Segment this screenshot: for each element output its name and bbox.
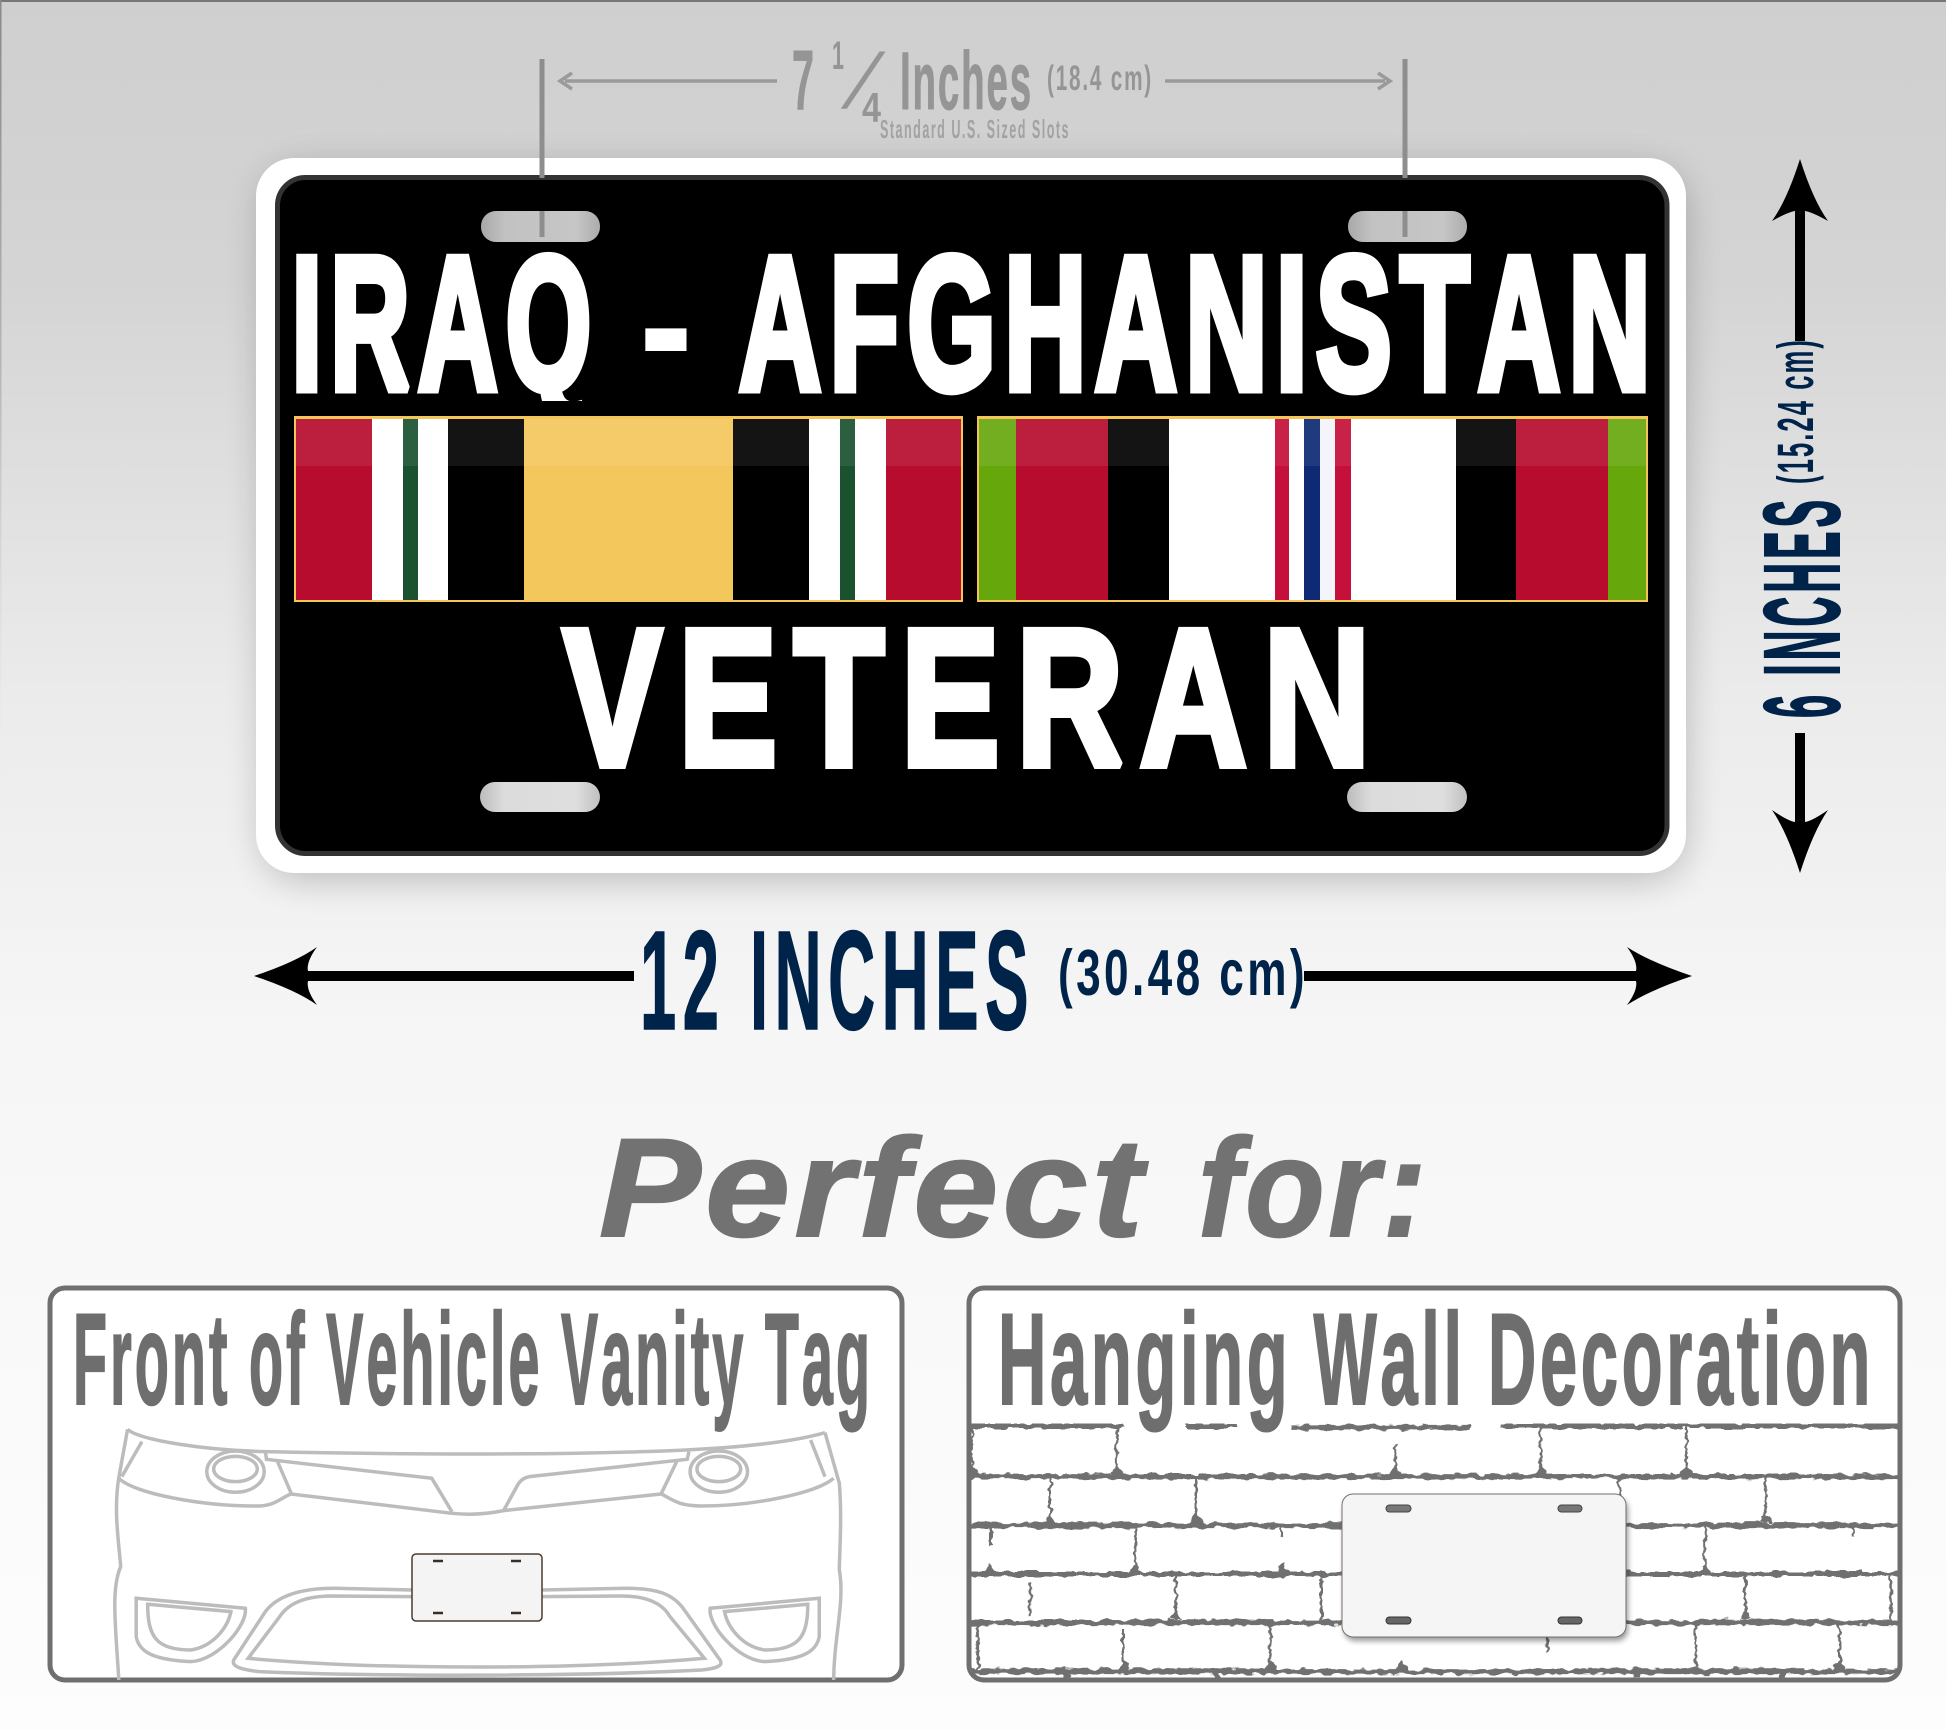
dimension label: 1	[832, 34, 844, 78]
slot spacing dimension: 7 1/4 inches	[560, 33, 1390, 144]
heading: IRAQ - AFGHANISTAN: -	[639, 218, 693, 430]
license plate	[256, 158, 1686, 873]
heading: Perfect for	[599, 1109, 1430, 1266]
infographic canvas: Front of Vehicle Vanity Tag	[73, 1286, 873, 1432]
arrow: down	[1772, 733, 1828, 873]
panel frame	[50, 1288, 902, 1680]
plate black face	[278, 178, 1667, 854]
slot guide line: right	[1402, 59, 1408, 237]
panel: hanging wall decoration	[969, 1286, 1902, 1680]
ribbon: Iraq campaign	[294, 416, 963, 602]
dimension label: Standard U.S. Sized Slots	[880, 114, 1070, 144]
heading: IRAQ - AFGHANISTAN	[292, 218, 1659, 430]
dimension label: 7	[792, 33, 814, 127]
width dimension: 12 inches: 12 INCHES	[640, 901, 1035, 1059]
slot guide line: left	[540, 59, 544, 237]
mounting slots	[480, 211, 1467, 812]
dimension label: /	[834, 39, 891, 125]
mask under Q tail	[294, 401, 634, 417]
label: metric width: (30.48 cm)	[1058, 936, 1308, 1009]
icon: car front outline	[115, 1429, 841, 1683]
dimension arrow: left	[560, 73, 777, 89]
panel frame	[969, 1288, 1900, 1680]
plate shadow	[262, 168, 1686, 880]
dimension label: 4	[862, 84, 882, 131]
blank plate on wall	[1342, 1494, 1628, 1641]
label: metric height: (15.24 cm)	[1767, 338, 1824, 484]
brick wall	[969, 1424, 1902, 1678]
arrow: right	[1304, 947, 1692, 1005]
ribbon: Afghanistan campaign	[977, 416, 1648, 602]
arrow: left	[254, 947, 634, 1005]
panel: front of vehicle	[50, 1286, 902, 1683]
width dimension: 12 inches	[254, 901, 1692, 1059]
heading: Perfect for: for:	[1198, 1109, 1430, 1266]
dimension label: Inches	[900, 36, 1033, 127]
dimension label: (18.4 cm)	[1047, 59, 1153, 98]
arrow: up	[1772, 159, 1828, 341]
plate white rim	[256, 158, 1686, 873]
heading: IRAQ - AFGHANISTAN: IRAQ	[292, 218, 600, 430]
heading: Perfect for: Perfect	[599, 1109, 1149, 1266]
small blank plate on car	[412, 1554, 542, 1621]
dimension label	[792, 33, 1153, 144]
height dimension: 6 inches: 6 INCHES	[1741, 496, 1862, 718]
heading: VETERAN: VETERAN	[563, 589, 1387, 807]
dimension arrow: right	[1165, 73, 1390, 89]
